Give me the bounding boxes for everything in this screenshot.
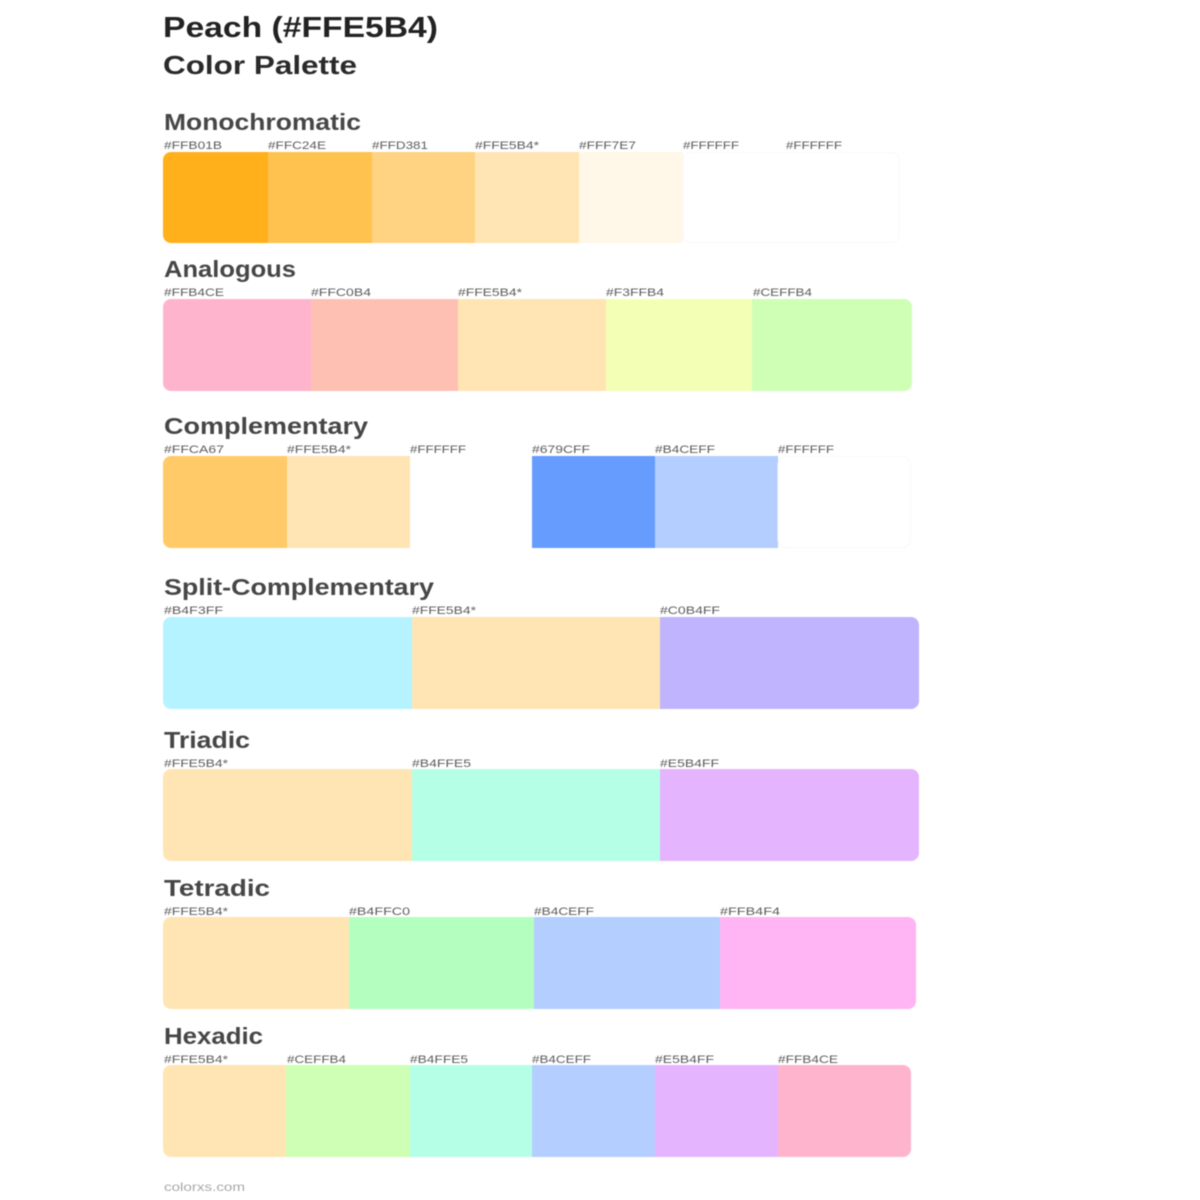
hex labels: monochromatic: #FFB01B xyxy=(164,140,222,152)
hex labels: tetradic xyxy=(164,906,780,918)
hex labels: tetradic: #B4FFC0 xyxy=(349,906,410,918)
panel: triadic xyxy=(163,727,919,861)
footer: source: colorxs.com xyxy=(164,1180,245,1194)
hex labels: monochromatic: #FFD381 xyxy=(372,140,428,152)
hex labels: complementary: #FFFFFF xyxy=(410,444,466,456)
hex labels: analogous: #FFE5B4* xyxy=(458,287,523,299)
heading: hexadic: Hexadic xyxy=(164,1023,263,1049)
swatches: split-complementary xyxy=(163,617,919,709)
hex labels: tetradic: #B4CEFF xyxy=(534,906,594,918)
swatches: complementary xyxy=(162,455,778,549)
hex labels: split-complementary xyxy=(164,605,720,617)
hex labels: hexadic: #E5B4FF xyxy=(655,1054,714,1066)
panel: split-complementary xyxy=(163,574,919,709)
heading: complementary: Complementary xyxy=(164,413,368,439)
hex labels: monochromatic: #FFFFFF xyxy=(683,140,739,152)
hex labels: analogous: #FFB4CE xyxy=(164,287,224,299)
hex labels: tetradic: #FFB4F4 xyxy=(720,906,780,918)
hex labels: tetradic: #FFE5B4* xyxy=(164,906,229,918)
hex labels: triadic xyxy=(164,758,719,770)
hex labels: hexadic: #FFB4CE xyxy=(778,1054,838,1066)
hex labels: hexadic: #B4FFE5 xyxy=(410,1054,468,1066)
hex labels: monochromatic: #FFF7E7 xyxy=(579,140,636,152)
hex labels: analogous: #FFC0B4 xyxy=(311,287,371,299)
hex labels: analogous: #F3FFB4 xyxy=(606,287,664,299)
hex labels: analogous: #CEFFB4 xyxy=(753,287,812,299)
heading: analogous: Analogous xyxy=(164,256,296,282)
swatches: tetradic xyxy=(163,917,916,1009)
hex labels: complementary: #B4CEFF xyxy=(655,444,715,456)
panel: monochromatic xyxy=(163,109,900,243)
hex labels: split-complementary: #B4F3FF xyxy=(164,605,223,617)
title: Peach (#FFE5B4) xyxy=(163,12,438,44)
panel: analogous xyxy=(163,256,912,391)
hex labels: monochromatic: #FFC24E xyxy=(268,140,326,152)
swatches: analogous xyxy=(163,299,912,391)
hex labels: split-complementary: #FFE5B4* xyxy=(412,605,477,617)
hex labels: hexadic: #B4CEFF xyxy=(532,1054,591,1066)
panel: hexadic xyxy=(163,1023,911,1157)
panel: complementary xyxy=(162,416,834,549)
hex labels: triadic: #E5B4FF xyxy=(660,758,719,770)
hex labels: split-complementary: #C0B4FF xyxy=(660,605,720,617)
hex labels: complementary: #FFE5B4* xyxy=(287,444,352,456)
heading: triadic: Triadic xyxy=(164,727,250,753)
hex labels: complementary: #679CFF xyxy=(532,444,590,456)
heading: monochromatic: Monochromatic xyxy=(164,109,361,135)
hex labels: triadic: #B4FFE5 xyxy=(412,758,471,770)
panel: tetradic xyxy=(163,875,916,1009)
swatches: hexadic xyxy=(163,1065,911,1157)
hex labels: monochromatic: #FFFFFF xyxy=(786,140,842,152)
hex labels: hexadic: #CEFFB4 xyxy=(287,1054,346,1066)
hex labels: complementary: #FFCA67 xyxy=(164,444,224,456)
hex labels: triadic: #FFE5B4* xyxy=(164,758,229,770)
hex labels: monochromatic xyxy=(164,140,842,152)
hex labels: hexadic xyxy=(164,1054,838,1066)
heading: tetradic: Tetradic xyxy=(164,875,270,901)
hex labels: complementary: #FFFFFF xyxy=(778,444,834,456)
swatches: triadic xyxy=(163,769,919,861)
hex labels: complementary xyxy=(164,444,834,456)
subtitle: Color Palette xyxy=(163,50,357,80)
swatches: monochromatic xyxy=(162,151,683,244)
hex labels: analogous xyxy=(164,287,812,299)
hex labels: monochromatic: #FFE5B4* xyxy=(475,140,540,152)
hex labels: hexadic: #FFE5B4* xyxy=(164,1054,229,1066)
heading: split-complementary: Split-Complementary xyxy=(164,574,434,600)
